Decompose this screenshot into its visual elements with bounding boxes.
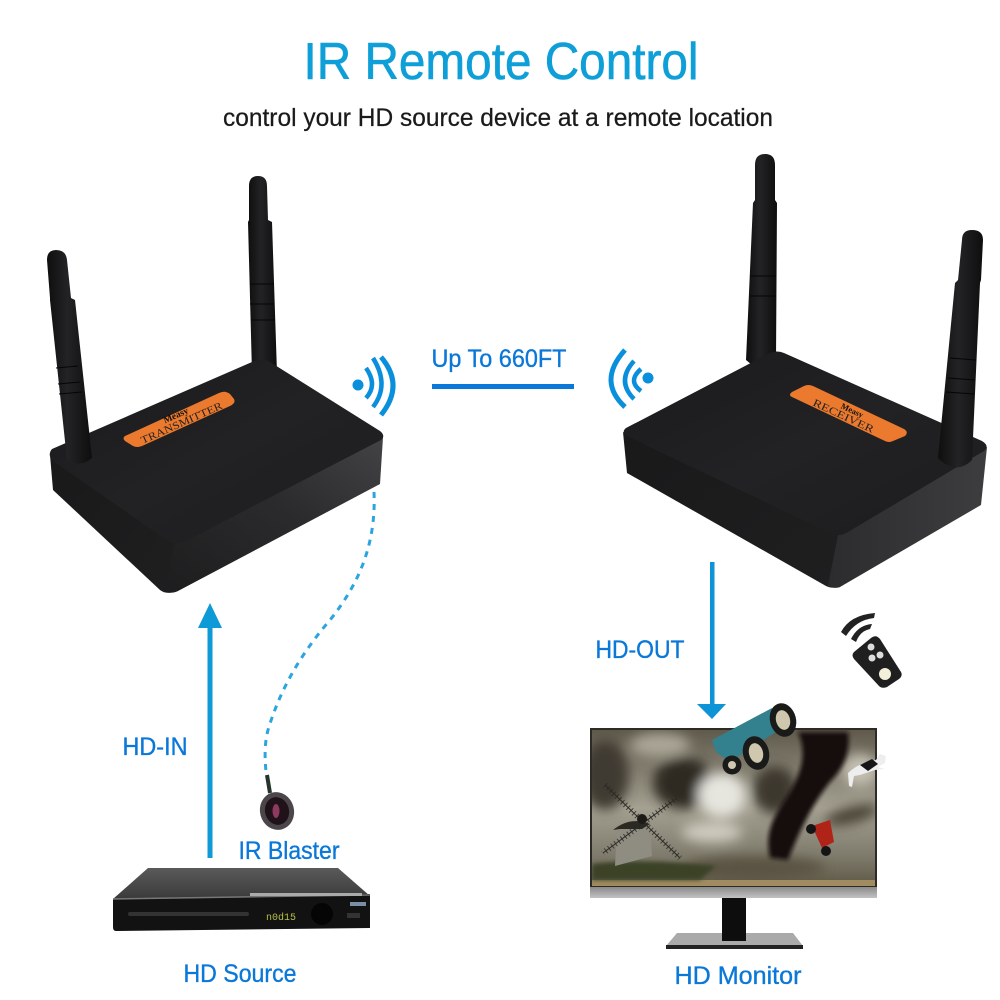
icon: wifi signal from transmitter <box>352 357 393 415</box>
icon: wifi signal to receiver <box>611 350 654 407</box>
HD-OUT label: HD-OUT <box>596 636 684 664</box>
receiver front antenna <box>938 230 983 468</box>
subtitle: control your HD source device at a remote location <box>223 104 773 132</box>
small red tractor <box>806 820 834 856</box>
HD source player: n0d15 <box>266 912 296 924</box>
IR Blaster label: IR Blaster <box>238 837 340 865</box>
receiver rear antenna <box>746 154 777 368</box>
monitor screen scene <box>581 728 881 887</box>
windmill blades <box>603 785 680 858</box>
range line <box>432 384 574 389</box>
transmitter orange label <box>124 392 234 447</box>
tractor flying out of the screen <box>712 700 800 774</box>
arrow: HD-OUT down <box>697 562 726 719</box>
range label: Up To 660FT <box>432 345 566 373</box>
arrow: HD-IN up <box>198 603 222 858</box>
transmitter front antenna <box>47 250 92 464</box>
HD Monitor label: HD Monitor <box>674 962 802 990</box>
HD monitor <box>581 700 886 949</box>
transmitter orange label: TRANSMITTER <box>140 401 224 447</box>
tornado <box>768 732 849 860</box>
monitor chin <box>590 886 877 898</box>
receiver orange label <box>790 385 907 442</box>
windmill tower <box>615 824 652 866</box>
receiver orange label: RECEIVER <box>811 398 875 436</box>
transmitter device <box>47 176 383 593</box>
transmitter body <box>50 360 383 593</box>
monitor stand <box>666 897 803 949</box>
IR blaster <box>256 775 298 834</box>
transmitter orange label: Measy <box>162 406 190 426</box>
transmitter rear antenna <box>248 176 277 378</box>
receiver body <box>623 352 987 588</box>
receiver orange label: Measy <box>839 401 866 420</box>
ground <box>592 880 875 886</box>
HD-IN label: HD-IN <box>122 733 188 761</box>
HD Source label: HD Source <box>184 960 296 988</box>
icon: remote control <box>841 613 902 688</box>
receiver device <box>623 154 987 588</box>
cow <box>848 754 886 787</box>
HD source player <box>113 868 370 931</box>
title: IR Remote Control <box>304 33 698 91</box>
dashed IR cable <box>265 492 374 772</box>
